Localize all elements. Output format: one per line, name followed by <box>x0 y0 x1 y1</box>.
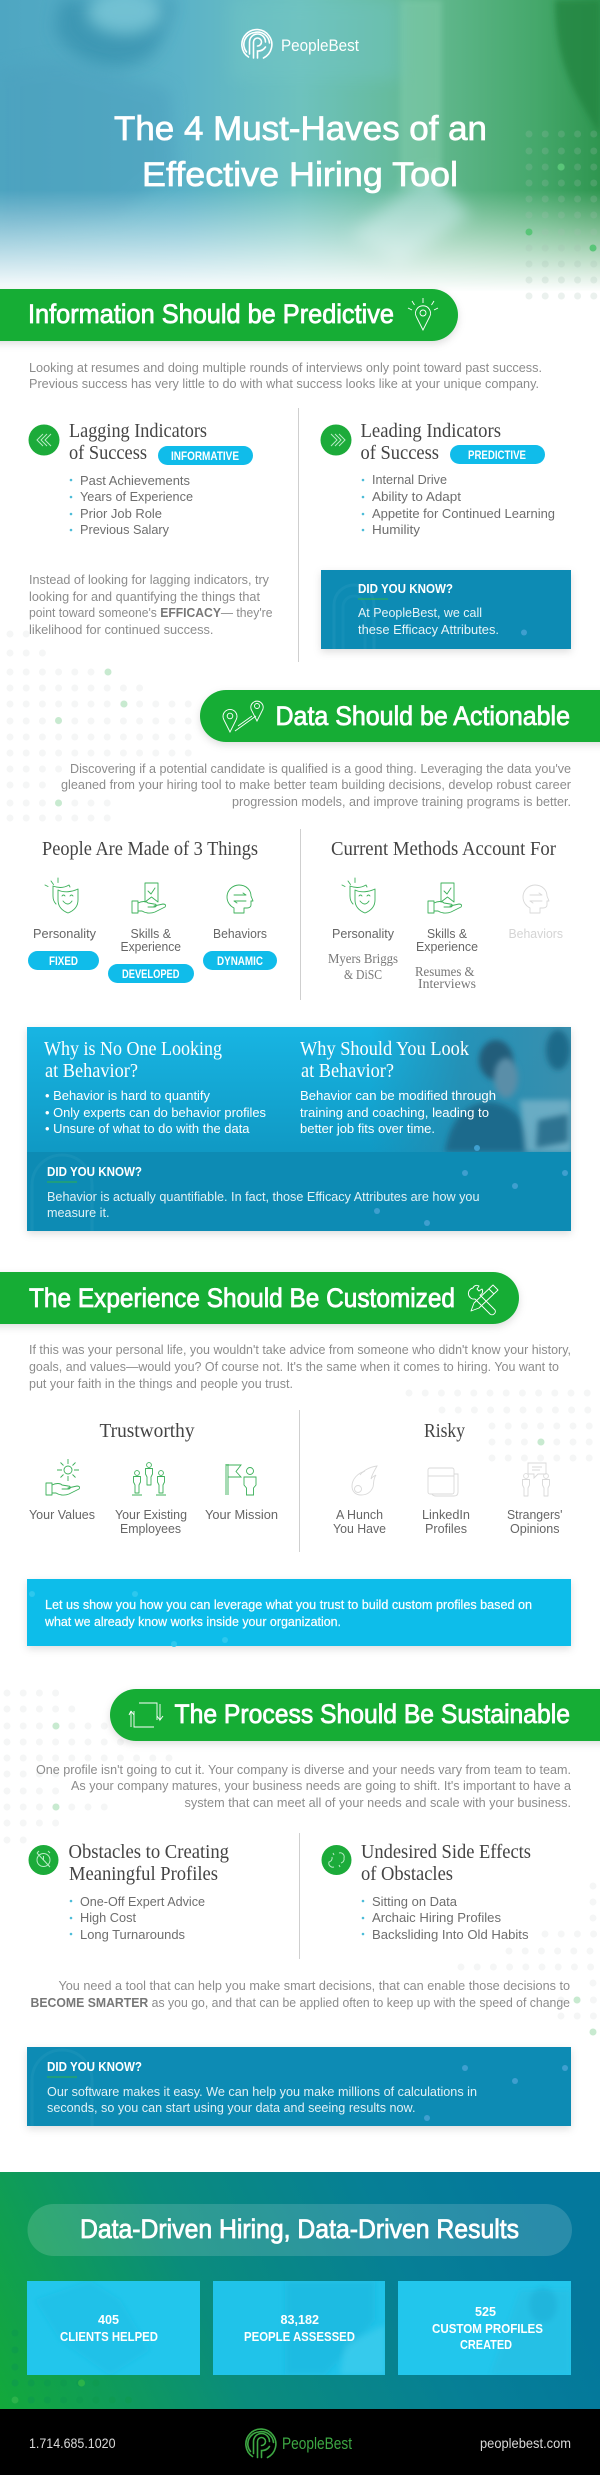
paragraph: efficacy: likelihood for continued success. <box>29 622 214 637</box>
heading: Trustworthy <box>100 1420 195 1442</box>
labels: Behaviors <box>213 926 267 941</box>
dot pattern: left of section 2 <box>10 634 200 818</box>
panel: results band <box>0 2172 600 2409</box>
text: why is no one looking: Why is No One Looking <box>44 1038 222 1060</box>
pill: informative: INFORMATIVE <box>171 451 239 463</box>
list: lagging indicators: Prior Job Role <box>80 506 162 521</box>
methods text: Resumes & <box>415 965 475 980</box>
callout: leverage what you trust: Let us show you how you can leverage what you trust to build custom profiles based on <box>45 1597 532 1612</box>
paragraph: efficacy: point toward someone's EFFICACY— they're <box>29 605 272 620</box>
panel: obstacles <box>28 1841 229 1942</box>
heading: of Obstacles <box>361 1863 453 1885</box>
stat: clients helped <box>27 2281 200 2375</box>
list: leading indicators: Internal Drive <box>372 472 447 487</box>
paragraph: smart decisions: BECOME SMARTER as you go, and that can be applied often to keep up with the speed of change <box>30 1995 570 2010</box>
panel: current methods account for <box>328 838 563 992</box>
dot pattern: header right <box>529 134 600 296</box>
heading: Meaningful Profiles <box>69 1863 218 1885</box>
labels: You Have <box>333 1521 386 1536</box>
labels: Strangers' <box>507 1507 562 1522</box>
pill: informative <box>158 446 253 465</box>
stat: custom profiles created: 525 <box>475 2304 496 2319</box>
title: The 4 Must-Haves of an <box>114 110 487 148</box>
text: why should you look <box>300 1038 496 1136</box>
callout: leverage what you trust: what we already know works inside your organization. <box>44 1614 341 1629</box>
list: obstacles: Long Turnarounds <box>80 1927 185 1942</box>
panel: leading indicators <box>320 420 571 649</box>
icon: hand with sun <box>46 1459 80 1495</box>
list: leading indicators: Appetite for Continued Learning <box>372 506 555 521</box>
pill: dynamic: DYNAMIC <box>217 956 263 968</box>
icon: forward arrows <box>320 424 352 456</box>
heading: Obstacles to Creating <box>68 1841 229 1863</box>
panel: risky <box>333 1420 562 1536</box>
footer <box>0 2409 600 2475</box>
intro paragraph 1 <box>29 360 542 391</box>
stat: people assessed: PEOPLE ASSESSED <box>244 2329 355 2344</box>
banner: The Experience Should Be Customized: The Experience Should Be Customized <box>29 1283 455 1313</box>
footer: 1.714.685.1020 <box>29 2435 116 2451</box>
paragraph: smart decisions: You need a tool that can help you make smart decisions, that can enable those decisions to <box>58 1978 570 1993</box>
heading: of Success <box>69 442 147 464</box>
panel: side effects <box>322 1841 531 1942</box>
heading: Lagging Indicators <box>69 420 207 442</box>
text: why should you look: Why Should You Look <box>300 1038 470 1060</box>
banner: The Experience Should Be Customized <box>0 1272 519 1324</box>
callout: did you know software: Our software makes it easy. We can help you make millions of calculations in <box>47 2084 477 2099</box>
paragraph: efficacy <box>29 572 272 637</box>
stat: clients helped: 405 <box>98 2312 119 2327</box>
banner: Data Should be Actionable <box>200 690 600 742</box>
stat: custom profiles created: CREATED <box>460 2337 512 2352</box>
labels: Your Values <box>29 1507 95 1522</box>
icon: flag and person <box>226 1464 256 1495</box>
intro paragraph 4: As your company matures, your business needs are going to shift. It's important to have a <box>71 1778 572 1793</box>
text: why is no one looking: • Unsure of what to do with the data <box>45 1121 250 1136</box>
intro paragraph 3: put your faith in the things and people you trust. <box>29 1376 293 1391</box>
intro paragraph 2 <box>61 761 572 809</box>
icon: back arrows <box>28 424 60 456</box>
photo: man at laptop <box>370 1027 571 1152</box>
heading: Current Methods Account For <box>331 838 556 860</box>
callout: did you know software: seconds, so you can start using your data and seeing results now. <box>47 2100 416 2115</box>
intro paragraph 4: system that can meet all of your needs and scale with your business. <box>184 1795 571 1810</box>
heading: Leading Indicators <box>360 420 501 442</box>
labels: Personality <box>332 926 394 941</box>
methods text: Myers Briggs <box>328 952 398 967</box>
intro paragraph 3 <box>29 1342 571 1391</box>
intro paragraph 2: gleaned from your hiring tool to make better team building decisions, develop robust career <box>61 777 572 792</box>
logo: PeopleBest header: PeopleBest <box>281 36 359 55</box>
intro paragraph 2: Discovering if a potential candidate is qualified is a good thing. Leveraging the data you've <box>70 761 571 776</box>
icon: existing employees <box>132 1463 166 1495</box>
icon: pencil and wrench <box>468 1285 498 1315</box>
panel: lagging indicators <box>28 420 272 637</box>
labels: Employees <box>120 1521 181 1536</box>
heading <box>68 1841 229 1885</box>
dot pattern: band lower left <box>15 2333 135 2400</box>
intro paragraph 1: Looking at resumes and doing multiple rounds of interviews only point toward past success. <box>29 360 542 375</box>
stat: people assessed: 83,182 <box>280 2312 319 2327</box>
intro paragraph 3: goals, and values—would you? Of course not. It's the same when it comes to hiring. You want to <box>29 1359 559 1374</box>
panel: trustworthy <box>29 1420 278 1536</box>
icon: skills hand <box>132 883 166 913</box>
callout: did you know software <box>27 2047 571 2126</box>
stat: clients helped: CLIENTS HELPED <box>60 2329 158 2344</box>
icon: skills hand <box>428 883 462 913</box>
list: side effects: Backsliding Into Old Habits <box>372 1927 529 1942</box>
logo: PeopleBest header <box>242 30 359 58</box>
intro paragraph 2: progression models, and improve training programs is better. <box>232 794 571 809</box>
list: lagging indicators: Past Achievements <box>80 473 190 488</box>
methods text: Interviews <box>418 977 476 992</box>
text: why should you look: better job fits over time. <box>300 1121 435 1136</box>
heading <box>360 420 501 464</box>
labels: Experience <box>120 939 181 954</box>
paragraph: efficacy: looking for and quantifying the things that <box>29 589 260 604</box>
dot pattern: left of section 4 <box>7 1693 176 1840</box>
header photo <box>0 0 600 300</box>
icon: route pins <box>223 701 263 732</box>
icon: location pin with rays <box>408 298 438 330</box>
heading pill <box>28 2204 572 2256</box>
icon: personality mask <box>45 878 78 913</box>
banner: The Process Should Be Sustainable: The Process Should Be Sustainable <box>174 1699 570 1729</box>
list: lagging indicators <box>70 473 193 537</box>
labels <box>332 926 563 954</box>
heading: People Are Made of 3 Things <box>42 838 258 860</box>
labels: A Hunch <box>336 1507 383 1522</box>
callout: did you know efficacy: DID YOU KNOW? <box>358 581 453 596</box>
list: lagging indicators: Previous Salary <box>80 522 169 537</box>
callout: did you know efficacy: At PeopleBest, we call <box>358 605 482 620</box>
dot pattern: right of section 3 <box>409 1393 600 1458</box>
panel: why behavior <box>27 1027 571 1231</box>
labels: Profiles <box>425 1521 467 1536</box>
intro paragraph 4 <box>36 1762 572 1810</box>
heading: of Success <box>360 442 439 464</box>
banner: Data Should be Actionable: Data Should be Actionable <box>276 701 570 731</box>
labels: Skills & <box>130 926 171 941</box>
labels: LinkedIn <box>422 1507 470 1522</box>
text: why should you look: Behavior can be modified through <box>300 1088 496 1103</box>
labels <box>333 1507 562 1536</box>
callout: did you know quantifiable: Behavior is actually quantifiable. In fact, those Efficacy Attributes are how you <box>47 1189 480 1204</box>
text: why should you look: training and coaching, leading to <box>300 1105 489 1120</box>
list: obstacles <box>70 1894 205 1942</box>
heading <box>69 420 207 464</box>
logo: PeopleBest footer <box>246 2429 352 2458</box>
labels: Opinions <box>510 1521 560 1536</box>
text: why is no one looking: at Behavior? <box>45 1060 138 1082</box>
callout: did you know efficacy: these Efficacy Attributes. <box>358 622 499 637</box>
pill: developed: DEVELOPED <box>122 969 180 981</box>
list: leading indicators: Ability to Adapt <box>372 489 461 504</box>
methods text <box>328 952 476 992</box>
callout: leverage what you trust <box>27 1579 571 1647</box>
icon: personality mask <box>342 878 375 913</box>
banner: Information Should be Predictive: Information Should be Predictive <box>28 299 394 329</box>
dot pattern: right of section 4 <box>461 1886 600 2016</box>
icon: linkedin window <box>428 1468 458 1496</box>
callout: did you know efficacy <box>321 570 571 649</box>
stat: custom profiles created: CUSTOM PROFILES <box>432 2321 543 2336</box>
list: leading indicators <box>362 472 555 537</box>
pill: fixed: FIXED <box>49 956 78 968</box>
list: obstacles: One-Off Expert Advice <box>80 1894 205 1909</box>
list: obstacles: High Cost <box>80 1910 136 1925</box>
icon: crossed clock <box>28 1845 58 1875</box>
text: why is no one looking <box>44 1038 266 1136</box>
list: side effects: Sitting on Data <box>372 1894 458 1909</box>
callout: did you know quantifiable: DID YOU KNOW? <box>47 1164 142 1179</box>
labels: Skills & <box>427 926 467 941</box>
labels: Personality <box>33 926 96 941</box>
paragraph: efficacy: Instead of looking for lagging indicators, try <box>29 572 269 587</box>
list: side effects <box>362 1894 529 1942</box>
labels: Behaviors <box>508 926 563 941</box>
panel: people are made of 3 things <box>28 838 277 983</box>
heading pill: Data-Driven Hiring, Data-Driven Results <box>80 2214 519 2244</box>
pill: dynamic <box>203 951 277 970</box>
labels: Your Existing <box>115 1507 187 1522</box>
icon: cycle arrows <box>129 1703 163 1727</box>
callout: did you know software: DID YOU KNOW? <box>47 2059 142 2074</box>
list: side effects: Archaic Hiring Profiles <box>372 1910 502 1925</box>
labels: Experience <box>416 939 478 954</box>
intro paragraph 1: Previous success has very little to do with what success looks like at your unique company. <box>29 376 539 391</box>
text: why is no one looking: • Only experts can do behavior profiles <box>45 1105 266 1120</box>
callout: did you know quantifiable: measure it. <box>47 1205 110 1220</box>
footer: peoplebest.com <box>480 2435 571 2451</box>
intro paragraph 4: One profile isn't going to cut it. Your company is diverse and your needs vary from team to team. <box>36 1762 571 1777</box>
callout: did you know quantifiable <box>32 1145 568 1231</box>
stat: people assessed <box>213 2281 385 2375</box>
heading <box>361 1841 531 1885</box>
icon: flame hunch <box>352 1466 377 1495</box>
icon: behaviors head faded <box>523 885 549 913</box>
icon: behaviors head <box>227 885 253 913</box>
icon: broken link <box>322 1845 352 1875</box>
pill: predictive <box>450 445 545 464</box>
logo: PeopleBest footer: PeopleBest <box>282 2434 352 2453</box>
pill: fixed <box>28 951 99 970</box>
heading: Undesired Side Effects <box>361 1841 531 1863</box>
stat: custom profiles created <box>398 2281 571 2375</box>
heading: Risky <box>424 1420 466 1442</box>
pill: developed <box>108 964 194 983</box>
banner: Information Should be Predictive <box>0 289 458 341</box>
intro paragraph 3: If this was your personal life, you wouldn't take advice from someone who didn't know your history, <box>29 1342 571 1357</box>
paragraph: smart decisions <box>30 1978 570 2010</box>
labels <box>33 926 267 954</box>
labels: Your Mission <box>205 1507 278 1522</box>
methods text: & DiSC <box>344 968 382 983</box>
pill: predictive: PREDICTIVE <box>468 450 526 462</box>
title <box>114 110 487 194</box>
text: why should you look: at Behavior? <box>301 1060 394 1082</box>
list: lagging indicators: Years of Experience <box>80 489 193 504</box>
title: Effective Hiring Tool <box>142 156 458 194</box>
text: why is no one looking: • Behavior is hard to quantify <box>45 1088 210 1103</box>
list: leading indicators: Humility <box>372 522 421 537</box>
icon: strangers speech <box>522 1463 550 1496</box>
banner: The Process Should Be Sustainable <box>110 1689 600 1741</box>
labels <box>29 1507 278 1536</box>
